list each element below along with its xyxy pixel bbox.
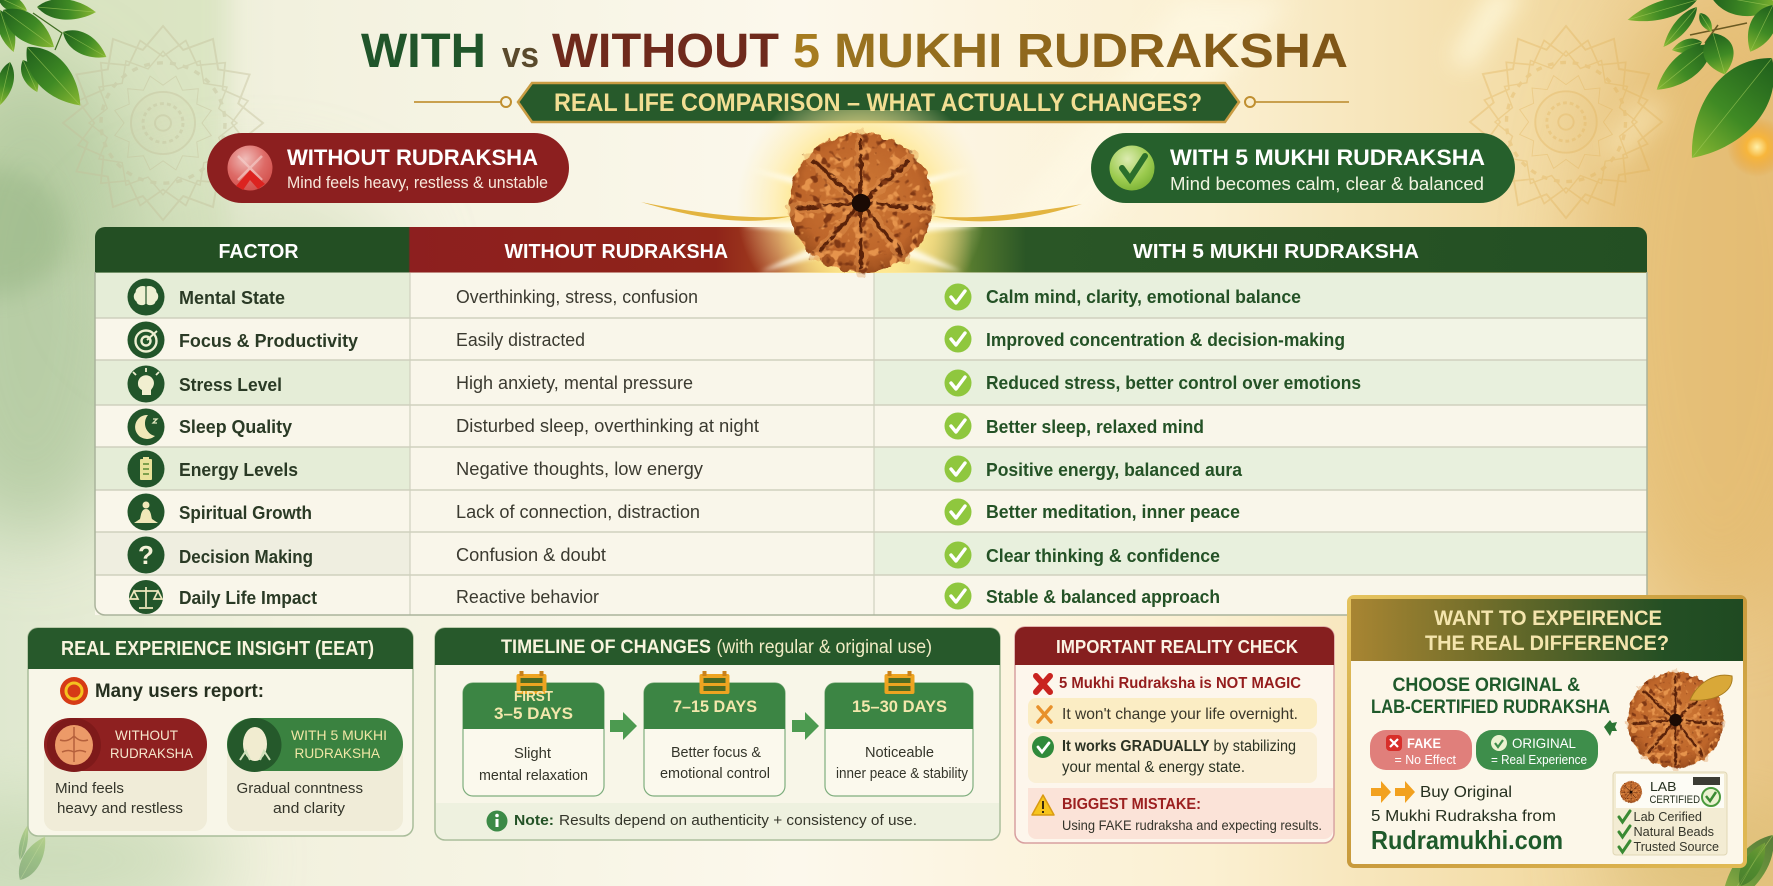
panel heading: [1351, 599, 1743, 661]
panel: timeline of changes: [435, 628, 1000, 840]
note: Note:: [514, 812, 554, 829]
row: energy levels: Energy Levels: [179, 460, 298, 480]
icon: target: [128, 322, 164, 358]
row: stress level: [128, 366, 1361, 402]
step: 7-15 days: [644, 671, 785, 796]
title: MUKHI RUDRAKSHA: [834, 25, 1348, 78]
row: decision making: Clear thinking & confidence: [986, 546, 1220, 566]
table rows background: [95, 272, 1647, 615]
gradually callout: [1028, 732, 1317, 783]
table header: FACTOR: [218, 241, 299, 263]
original pill: = Real Experience: [1491, 752, 1587, 767]
step: 15-30 days: [825, 671, 973, 796]
table header: [95, 227, 1647, 272]
step: 7-15 days: emotional control: [660, 765, 770, 782]
table header: WITH 5 MUKHI RUDRAKSHA: [1133, 241, 1419, 263]
title: 5: [793, 25, 820, 78]
choose heading: LAB-CERTIFIED RUDRAKSHA: [1371, 697, 1610, 718]
icon: om badge: [60, 677, 88, 705]
pill: with rudraksha: WITH 5 MUKHI RUDRAKSHA: [1170, 145, 1485, 170]
subtitle ribbon: [414, 83, 1349, 122]
without card: [44, 718, 207, 831]
note: [436, 803, 999, 839]
without card: Mind feels: [55, 780, 124, 797]
icon: calendar: [700, 671, 730, 694]
panel: important reality check: [1015, 627, 1334, 843]
pill: without rudraksha: [207, 133, 569, 203]
pill: with rudraksha: Mind becomes calm, clear & balanced: [1170, 174, 1484, 194]
icon: green badge: [1702, 788, 1720, 806]
row: energy levels: Positive energy, balanced aura: [986, 460, 1243, 480]
row: sleep quality: Sleep Quality: [179, 417, 292, 437]
row: mental state: Calm mind, clarity, emotional balance: [986, 287, 1301, 307]
overnight callout: It won't change your life overnight.: [1062, 706, 1298, 723]
buy text: Rudramukhi.com: [1371, 825, 1563, 855]
row: sleep quality: [128, 408, 1204, 446]
without card: WITHOUT: [115, 727, 178, 743]
fake pill: FAKE: [1407, 735, 1441, 751]
leaves top left: [0, 0, 111, 116]
gradually callout: It works GRADUALLY by stabilizing: [1062, 738, 1296, 755]
icon: calm face: [228, 718, 282, 772]
row: daily life impact: Reactive behavior: [456, 587, 599, 607]
lab certified box: Natural Beads: [1634, 824, 1714, 839]
icon: brain: [47, 718, 101, 772]
row: mental state: Overthinking, stress, confusion: [456, 287, 698, 307]
gradually callout: your mental & energy state.: [1062, 759, 1245, 776]
row: decision making: [128, 536, 1220, 574]
panel: real experience insight: Many users report:: [95, 681, 264, 702]
icon: moon: [128, 408, 164, 446]
row: daily life impact: [129, 580, 1220, 614]
icon: green check: [1110, 146, 1154, 190]
lab certified box: LAB: [1650, 779, 1676, 794]
row: focus and productivity: Improved concentration & decision-making: [986, 330, 1345, 350]
panel heading: [28, 628, 413, 669]
panel heading: (with regular & original use): [716, 637, 932, 658]
icon: info: [486, 810, 508, 832]
step: first 3-5 days: Slight: [514, 745, 552, 762]
row: daily life impact: Daily Life Impact: [179, 588, 317, 608]
icon: orange arrows: [1371, 781, 1415, 803]
step: 15-30 days: 15–30 DAYS: [852, 697, 947, 716]
row: energy levels: [128, 450, 1243, 488]
buy text: Buy Original: [1420, 784, 1512, 801]
buy text: 5 Mukhi Rudraksha from: [1371, 808, 1556, 825]
panel heading: [435, 628, 1000, 665]
icon: question: [128, 536, 164, 574]
lab certified box: [1613, 772, 1727, 855]
with card: [227, 718, 403, 831]
icon: red cross: [228, 146, 272, 190]
title: vs: [502, 34, 539, 75]
row: sleep quality: Better sleep, relaxed mind: [986, 417, 1204, 437]
leaves bottom right: [1709, 826, 1773, 886]
row: sleep quality: Disturbed sleep, overthinking at night: [456, 416, 759, 436]
mandala left: [55, 18, 271, 228]
row: mental state: [128, 278, 1301, 316]
without card: RUDRAKSHA: [110, 745, 194, 761]
row: spiritual growth: [128, 494, 1240, 530]
icon: gold ornament: [1690, 675, 1732, 700]
mandala right: [1463, 19, 1669, 225]
row: spiritual growth: Lack of connection, distraction: [456, 502, 700, 522]
icon: question: ?: [138, 540, 154, 570]
panel: real experience insight: [28, 628, 413, 836]
step: first 3-5 days: [463, 671, 604, 796]
step: first 3-5 days: FIRST: [514, 688, 553, 705]
title: [361, 25, 1348, 78]
rudraksha bead with glow: [642, 110, 1082, 278]
step: 7-15 days: 7–15 DAYS: [673, 697, 757, 716]
row: daily life impact: Stable & balanced approach: [986, 587, 1220, 607]
row: focus and productivity: Easily distracted: [456, 330, 585, 350]
buy text: [1371, 781, 1563, 855]
icon: scales: [129, 580, 163, 614]
panel heading: THE REAL DIFFERENCE?: [1425, 632, 1669, 655]
fake pill: [1370, 730, 1472, 770]
step: first 3-5 days: 3–5 DAYS: [494, 704, 573, 723]
row: decision making: Decision Making: [179, 547, 313, 567]
biggest mistake callout: Using FAKE rudraksha and expecting results.: [1062, 817, 1322, 833]
original pill: ORIGINAL: [1512, 735, 1576, 751]
choose heading: CHOOSE ORIGINAL &: [1392, 675, 1580, 696]
icon: check: [1032, 736, 1054, 758]
arrow: [610, 712, 637, 740]
icon: calendar: [516, 671, 546, 694]
comparison table: [95, 227, 1647, 615]
row: focus and productivity: Focus & Productivity: [179, 331, 358, 351]
row: mental state: Mental State: [179, 288, 285, 308]
with card: WITH 5 MUKHI: [291, 727, 387, 743]
fake pill: = No Effect: [1394, 752, 1456, 767]
arrow: [792, 712, 819, 740]
icon: cross: [1386, 735, 1402, 751]
icon: meditation: [128, 494, 164, 530]
row: spiritual growth: Better meditation, inner peace: [986, 502, 1240, 522]
icon: small leaf pointer: [1604, 720, 1617, 736]
title: WITHOUT: [552, 25, 779, 78]
row: focus and productivity: [128, 322, 1345, 358]
not magic line: 5 Mukhi Rudraksha is NOT MAGIC: [1059, 675, 1301, 692]
rudraksha bead: [1628, 672, 1724, 768]
icon: calendar: [884, 671, 914, 694]
without card: heavy and restless: [57, 800, 183, 817]
row: stress level: Stress Level: [179, 375, 282, 395]
overnight callout: [1028, 698, 1317, 729]
with card: Gradual conntness: [236, 780, 363, 797]
panel heading: [1015, 627, 1334, 665]
biggest mistake callout: [1028, 788, 1333, 839]
panel: call to action: [1349, 597, 1745, 866]
with card: and clarity: [273, 800, 346, 817]
subtitle ribbon: REAL LIFE COMPARISON – WHAT ACTUALLY CHANGES?: [554, 89, 1202, 117]
choose heading: [1371, 675, 1610, 718]
icon: battery: [128, 450, 164, 488]
lab certified box: Lab Cerified: [1634, 809, 1702, 824]
pill: with rudraksha: [1091, 133, 1515, 203]
icon: check: [1491, 735, 1507, 751]
mini bead: [1620, 781, 1642, 803]
pill: without rudraksha: Mind feels heavy, restless & unstable: [287, 173, 548, 192]
original pill: [1476, 730, 1598, 770]
panel heading: IMPORTANT REALITY CHECK: [1056, 637, 1298, 657]
pill: without rudraksha: WITHOUT RUDRAKSHA: [287, 145, 538, 170]
step: 15-30 days: Noticeable: [865, 744, 934, 761]
with card: RUDRAKSHA: [294, 745, 381, 761]
lab certified box: CERTIFIED: [1650, 794, 1700, 806]
lab certified box: Trusted Source: [1634, 839, 1719, 854]
panel heading: WANT TO EXPEIRENCE: [1434, 607, 1662, 630]
leaves bottom left: [12, 825, 53, 885]
icon: warning: [1032, 795, 1054, 815]
row: spiritual growth: Spiritual Growth: [179, 503, 312, 523]
row: stress level: High anxiety, mental pressure: [456, 373, 693, 393]
leaves top right: [1625, 0, 1773, 175]
step: first 3-5 days: mental relaxation: [479, 767, 588, 784]
panel heading: REAL EXPERIENCE INSIGHT (EEAT): [61, 638, 374, 660]
row: energy levels: Negative thoughts, low energy: [456, 459, 703, 479]
icon: head: [128, 366, 164, 402]
panel heading: TIMELINE OF CHANGES: [501, 637, 711, 658]
biggest mistake callout: BIGGEST MISTAKE:: [1062, 796, 1201, 813]
table header: WITHOUT RUDRAKSHA: [504, 241, 728, 263]
row: stress level: Reduced stress, better control over emotions: [986, 373, 1361, 393]
title: WITH: [361, 25, 486, 78]
step: 15-30 days: inner peace & stability: [836, 765, 968, 782]
step: 7-15 days: Better focus &: [671, 744, 761, 761]
icon: brain: [128, 278, 164, 316]
note: Results depend on authenticity + consistency of use.: [559, 812, 917, 829]
row: decision making: Confusion & doubt: [456, 545, 606, 565]
